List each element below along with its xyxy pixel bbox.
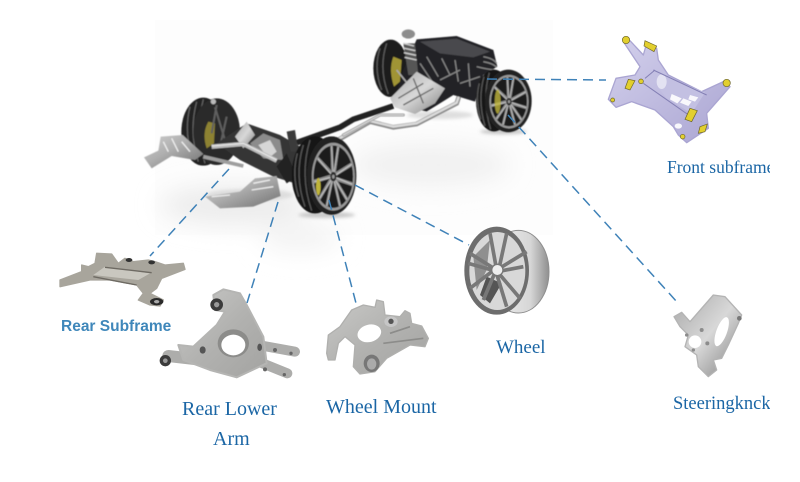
part: wheel mount: [327, 300, 428, 374]
car chassis illustration: [144, 29, 532, 218]
label: Rear Subframe: Rear Subframe: [61, 318, 172, 335]
front muffler: [205, 176, 281, 208]
label: Front subframe: Front subframe: [667, 157, 775, 177]
part: wheel: [464, 227, 549, 315]
engine: [393, 36, 497, 112]
transmission: [390, 72, 445, 114]
label: Rear Lower Arm: Rear Lower: [182, 398, 277, 420]
part: front subframe: [608, 36, 730, 143]
floor shadow: [160, 143, 510, 252]
rear far wheel: [181, 98, 240, 166]
connector: wheel mount: [329, 200, 357, 307]
connector: rear subframe: [150, 169, 229, 256]
rear axle: [203, 122, 300, 183]
rear muffler: [144, 135, 203, 168]
part: rear subframe: [60, 253, 185, 306]
background panel: [155, 20, 553, 235]
driveshaft: [297, 106, 393, 143]
connector: front subframe: [487, 79, 606, 80]
front strut: [397, 29, 418, 87]
contact shadows: [207, 111, 527, 218]
front far wheel: [373, 40, 408, 97]
label: Rear Lower Arm: Arm: [213, 428, 250, 450]
connector: wheel: [355, 185, 469, 245]
label: Wheel Mount: Wheel Mount: [326, 396, 437, 418]
part: steering knuckle: [674, 295, 742, 377]
label: Rear Lower Arm: [182, 398, 277, 450]
rear near wheel: [292, 136, 356, 215]
label: Wheel: Wheel: [496, 337, 546, 358]
connector: steering knuckle: [508, 115, 677, 302]
connector: rear lower arm: [247, 202, 278, 303]
exhaust pipes: [335, 83, 463, 142]
dashed connector lines: [150, 79, 677, 307]
label: Steering knuckle: Steeringknck: [673, 394, 771, 414]
front near wheel: [476, 70, 532, 132]
part: rear lower arm: [160, 289, 295, 377]
